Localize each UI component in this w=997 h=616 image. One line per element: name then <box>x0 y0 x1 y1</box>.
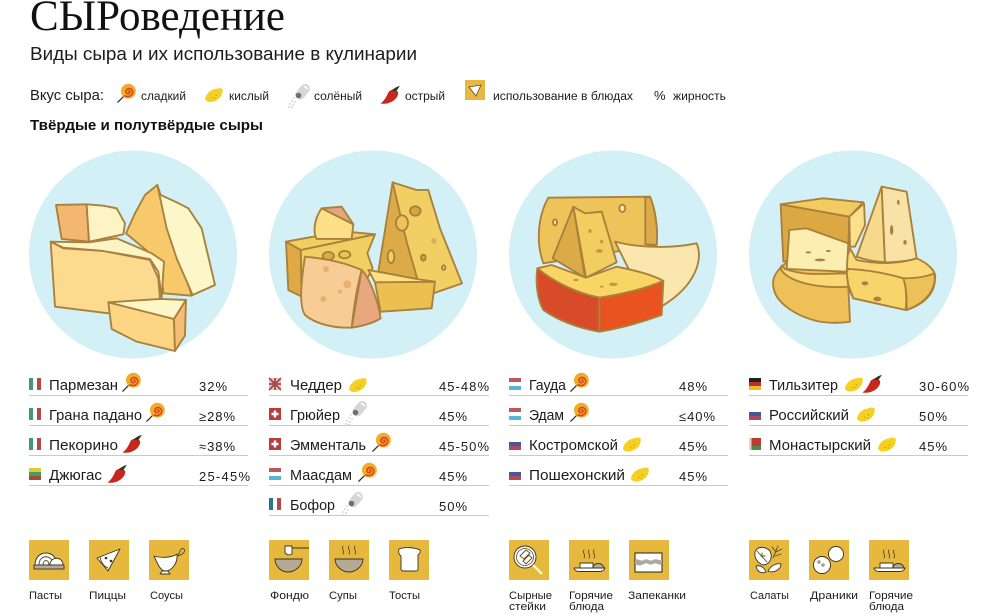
legend: sour <box>205 88 269 103</box>
section heading: Твёрдые и полутвёрдые сыры <box>30 117 263 134</box>
row: Пошехонский: 45% <box>679 469 707 484</box>
dish: Соусы: Соусы <box>150 590 183 602</box>
legend: sweet <box>117 84 186 103</box>
row: Грана падано <box>29 403 248 426</box>
row: Российский <box>749 407 968 426</box>
row: Костромской: Костромской <box>529 437 618 454</box>
row: Пекорино: Пекорино <box>49 437 118 454</box>
row: Грана падано: Грана падано <box>49 407 142 424</box>
row: Бофор: 50% <box>439 499 467 514</box>
row: Тильзитер: 30-60% <box>919 379 969 394</box>
dish: Горячие блюда 2 <box>869 540 913 613</box>
row: Маасдам: Маасдам <box>290 467 352 484</box>
dish: Салаты <box>749 540 789 602</box>
legend: fat content: % <box>654 88 666 103</box>
dish: Драники: Драники <box>810 590 858 602</box>
row: Чеддер: Чеддер <box>290 377 342 394</box>
table: column 3 <box>509 373 728 486</box>
row: Гауда <box>509 373 728 396</box>
legend: salty: солёный <box>314 91 362 103</box>
dish: Пасты <box>29 540 69 602</box>
row: Эмменталь: Эмменталь <box>290 437 366 454</box>
dish: Супы: Супы <box>329 590 357 602</box>
row: Российский: 50% <box>919 409 947 424</box>
dish: Горячие блюда 2: блюда <box>869 601 905 613</box>
row: Гауда: 48% <box>679 379 707 394</box>
row: Пошехонский <box>509 467 728 486</box>
dish: Запеканки: Запеканки <box>628 590 686 602</box>
row: Чеддер: 45-48% <box>439 379 489 394</box>
dish: Сырные стейки <box>509 540 552 613</box>
legend: sweet: сладкий <box>141 91 186 103</box>
illustration: Parmesan group cheeses <box>29 150 237 358</box>
row: Пармезан: Пармезан <box>49 377 118 394</box>
row: Пекорино: ≈38% <box>199 439 235 454</box>
row: Тильзитер: Тильзитер <box>769 377 838 394</box>
subtitle: Виды сыра и их использование в кулинарии <box>30 43 417 64</box>
dish: Сырные стейки: Сырные <box>509 590 552 602</box>
row: Грюйер: Грюйер <box>290 407 340 424</box>
row: Костромской: 45% <box>679 439 707 454</box>
row: Пекорино <box>29 436 248 456</box>
row: Грюйер <box>269 399 489 426</box>
row: Монастырский <box>749 437 968 456</box>
dish: Соусы <box>149 540 189 602</box>
legend: sour: кислый <box>229 91 269 103</box>
dish: Горячие блюда 2: Горячие <box>869 590 913 602</box>
dish: Запеканки <box>628 540 686 602</box>
row: Костромской <box>509 437 728 456</box>
legend: fat content <box>654 88 726 103</box>
row: Пармезан <box>29 373 248 396</box>
legend: fat content: жирность <box>673 91 726 103</box>
dish: Фондю <box>269 540 309 602</box>
row: Джюгас <box>29 466 250 486</box>
row: Российский: Российский <box>769 407 849 424</box>
dish: Пасты: Пасты <box>29 590 62 602</box>
row: Монастырский: Монастырский <box>769 437 871 454</box>
dish: Пиццы: Пиццы <box>89 590 126 602</box>
dish: Горячие блюда <box>569 540 613 613</box>
row: Гауда: Гауда <box>529 377 567 394</box>
row: Эдам: Эдам <box>529 407 564 424</box>
dish: Салаты: Салаты <box>750 590 789 602</box>
row: Грюйер: 45% <box>439 409 467 424</box>
dish: Пиццы <box>89 540 129 602</box>
row: Бофор: Бофор <box>290 497 335 514</box>
dish: Сырные стейки: стейки <box>509 601 546 613</box>
legend: spicy: острый <box>405 91 445 103</box>
row: Тильзитер <box>749 376 969 396</box>
legend: spicy <box>380 86 445 104</box>
illustration: Gouda group cheeses <box>509 150 717 358</box>
table: column 4 <box>749 376 969 456</box>
row: Бофор <box>269 490 489 516</box>
row: Эдам: ≤40% <box>679 409 715 424</box>
row: Монастырский: 45% <box>919 439 947 454</box>
table: column 1 <box>29 373 250 486</box>
row: Пошехонский: Пошехонский <box>529 467 625 484</box>
row: Джюгас: 25-45% <box>199 469 250 484</box>
row: Эдам <box>509 403 728 426</box>
dish: Горячие блюда: блюда <box>569 601 605 613</box>
dish: Супы <box>329 540 369 602</box>
legend <box>30 80 726 108</box>
legend: used in dishes: использование в блюдах <box>493 91 633 103</box>
row: Джюгас: Джюгас <box>49 467 102 484</box>
row: Маасдам: 45% <box>439 469 467 484</box>
illustration: Tilsiter group cheeses <box>749 150 957 358</box>
row: Маасдам <box>269 463 489 486</box>
table: column 2 <box>269 377 489 516</box>
dish: Фондю: Фондю <box>270 590 309 602</box>
row: Чеддер <box>269 377 489 396</box>
row: Эмменталь: 45-50% <box>439 439 489 454</box>
illustration: Cheddar group cheeses <box>269 150 477 358</box>
dish: Тосты <box>389 540 429 602</box>
row: Пармезан: 32% <box>199 379 227 394</box>
legend: used in dishes <box>465 80 633 103</box>
row: Грана падано: ≥28% <box>199 409 235 424</box>
dish: Горячие блюда: Горячие <box>569 590 613 602</box>
legend heading: Вкус сыра: <box>30 88 104 104</box>
row: Эмменталь <box>269 433 489 456</box>
dish: Драники <box>809 540 858 602</box>
legend: salty <box>288 82 362 108</box>
dish: Тосты: Тосты <box>389 590 420 602</box>
